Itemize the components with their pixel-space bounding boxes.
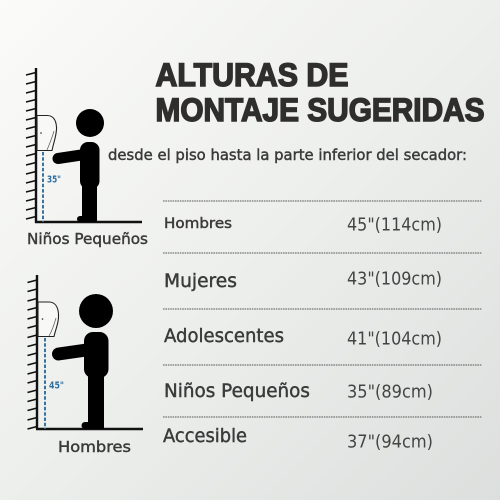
icon: hand dryer <box>38 302 59 336</box>
row: Mujeres: Mujeres <box>164 270 237 292</box>
row: Hombres <box>164 214 442 236</box>
height table <box>163 201 482 452</box>
icon: hand dryer <box>37 116 57 150</box>
title <box>156 57 484 128</box>
row: Accesible: 37"(94cm) <box>347 432 433 452</box>
wall with hatching <box>28 275 37 429</box>
row: Adolescentes: 41"(104cm) <box>347 328 442 350</box>
title: ALTURAS DE <box>156 57 348 93</box>
row: Hombres: Hombres <box>164 216 232 232</box>
row: Adolescentes: Adolescentes <box>164 325 284 347</box>
row: Accesible <box>163 425 433 452</box>
row: Mujeres <box>164 268 442 292</box>
row: Niños Pequeños <box>164 380 433 402</box>
wall with hatching <box>26 68 36 223</box>
floor <box>36 428 143 430</box>
label: child: Niños Pequeños <box>27 230 148 248</box>
subtitle: desde el piso hasta la parte inferior del secador: <box>108 146 467 164</box>
diagram: man height <box>28 275 143 429</box>
row: Hombres: 45"(114cm) <box>347 214 442 236</box>
label: man: Hombres <box>58 438 131 456</box>
icon: child figure <box>58 109 104 222</box>
title: MONTAJE SUGERIDAS <box>156 92 484 128</box>
row: Niños Pequeños: Niños Pequeños <box>164 380 310 402</box>
row: Accesible: Accesible <box>163 425 247 447</box>
dashed height line <box>42 152 44 222</box>
dashed height line <box>44 338 46 429</box>
icon: man figure <box>58 294 113 429</box>
floor <box>35 221 142 223</box>
row: Adolescentes <box>164 325 442 350</box>
row: Mujeres: 43"(109cm) <box>347 268 442 290</box>
height label 45: 45" <box>49 380 64 392</box>
row: Niños Pequeños: 35"(89cm) <box>347 382 433 402</box>
height label 35: 35" <box>47 174 61 186</box>
diagram: small child height <box>26 68 142 223</box>
